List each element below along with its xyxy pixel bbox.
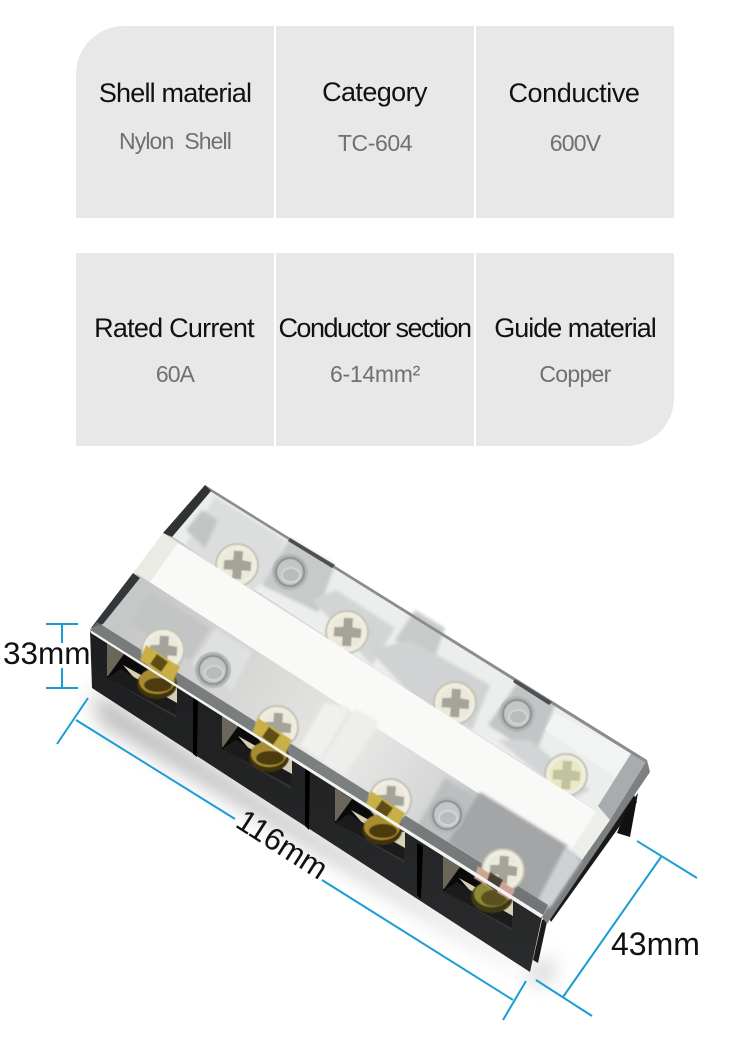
front screws [137, 629, 524, 891]
terminal body [90, 630, 542, 972]
dimension: width: 43mm [611, 926, 700, 962]
panel: conductive: Conductive [508, 78, 640, 108]
panel: conductor section: 6-14mm² [330, 361, 420, 387]
panel: conductive: 600V [550, 130, 600, 156]
shadow [92, 690, 555, 985]
white label band [133, 533, 610, 860]
panel: conductive [476, 26, 674, 218]
panel: rated current: 60A [156, 361, 194, 387]
cover front section [90, 573, 582, 918]
cover side skirt [542, 760, 650, 924]
panel: category: Category [322, 77, 427, 107]
cover front edge redraw [90, 630, 543, 918]
panel: shell material: Shell material [99, 78, 251, 108]
dimension lines [46, 624, 697, 1020]
pink screw clip [471, 866, 515, 913]
front rivets [195, 652, 465, 833]
panel: rated current: Rated Current [94, 313, 254, 343]
panel: guide material: Copper [539, 361, 611, 387]
cover top [90, 485, 647, 917]
panel: category [276, 26, 474, 218]
rear screws and rivets [216, 544, 587, 796]
dimension: length: 116mm [230, 802, 334, 886]
dimension: height: 33mm [3, 635, 91, 671]
panel: conductor section [276, 253, 474, 446]
panel: conductor section: Conductor section [278, 313, 471, 343]
mounting rail [533, 790, 638, 963]
cover rear section [163, 485, 647, 820]
panel: guide material [476, 253, 674, 446]
panel: rated current [76, 253, 274, 446]
panel: guide material: Guide material [494, 313, 656, 343]
panel: category: TC-604 [338, 130, 412, 156]
panel: shell material: Nylon Shell [119, 128, 231, 154]
panel: shell material [76, 26, 274, 218]
